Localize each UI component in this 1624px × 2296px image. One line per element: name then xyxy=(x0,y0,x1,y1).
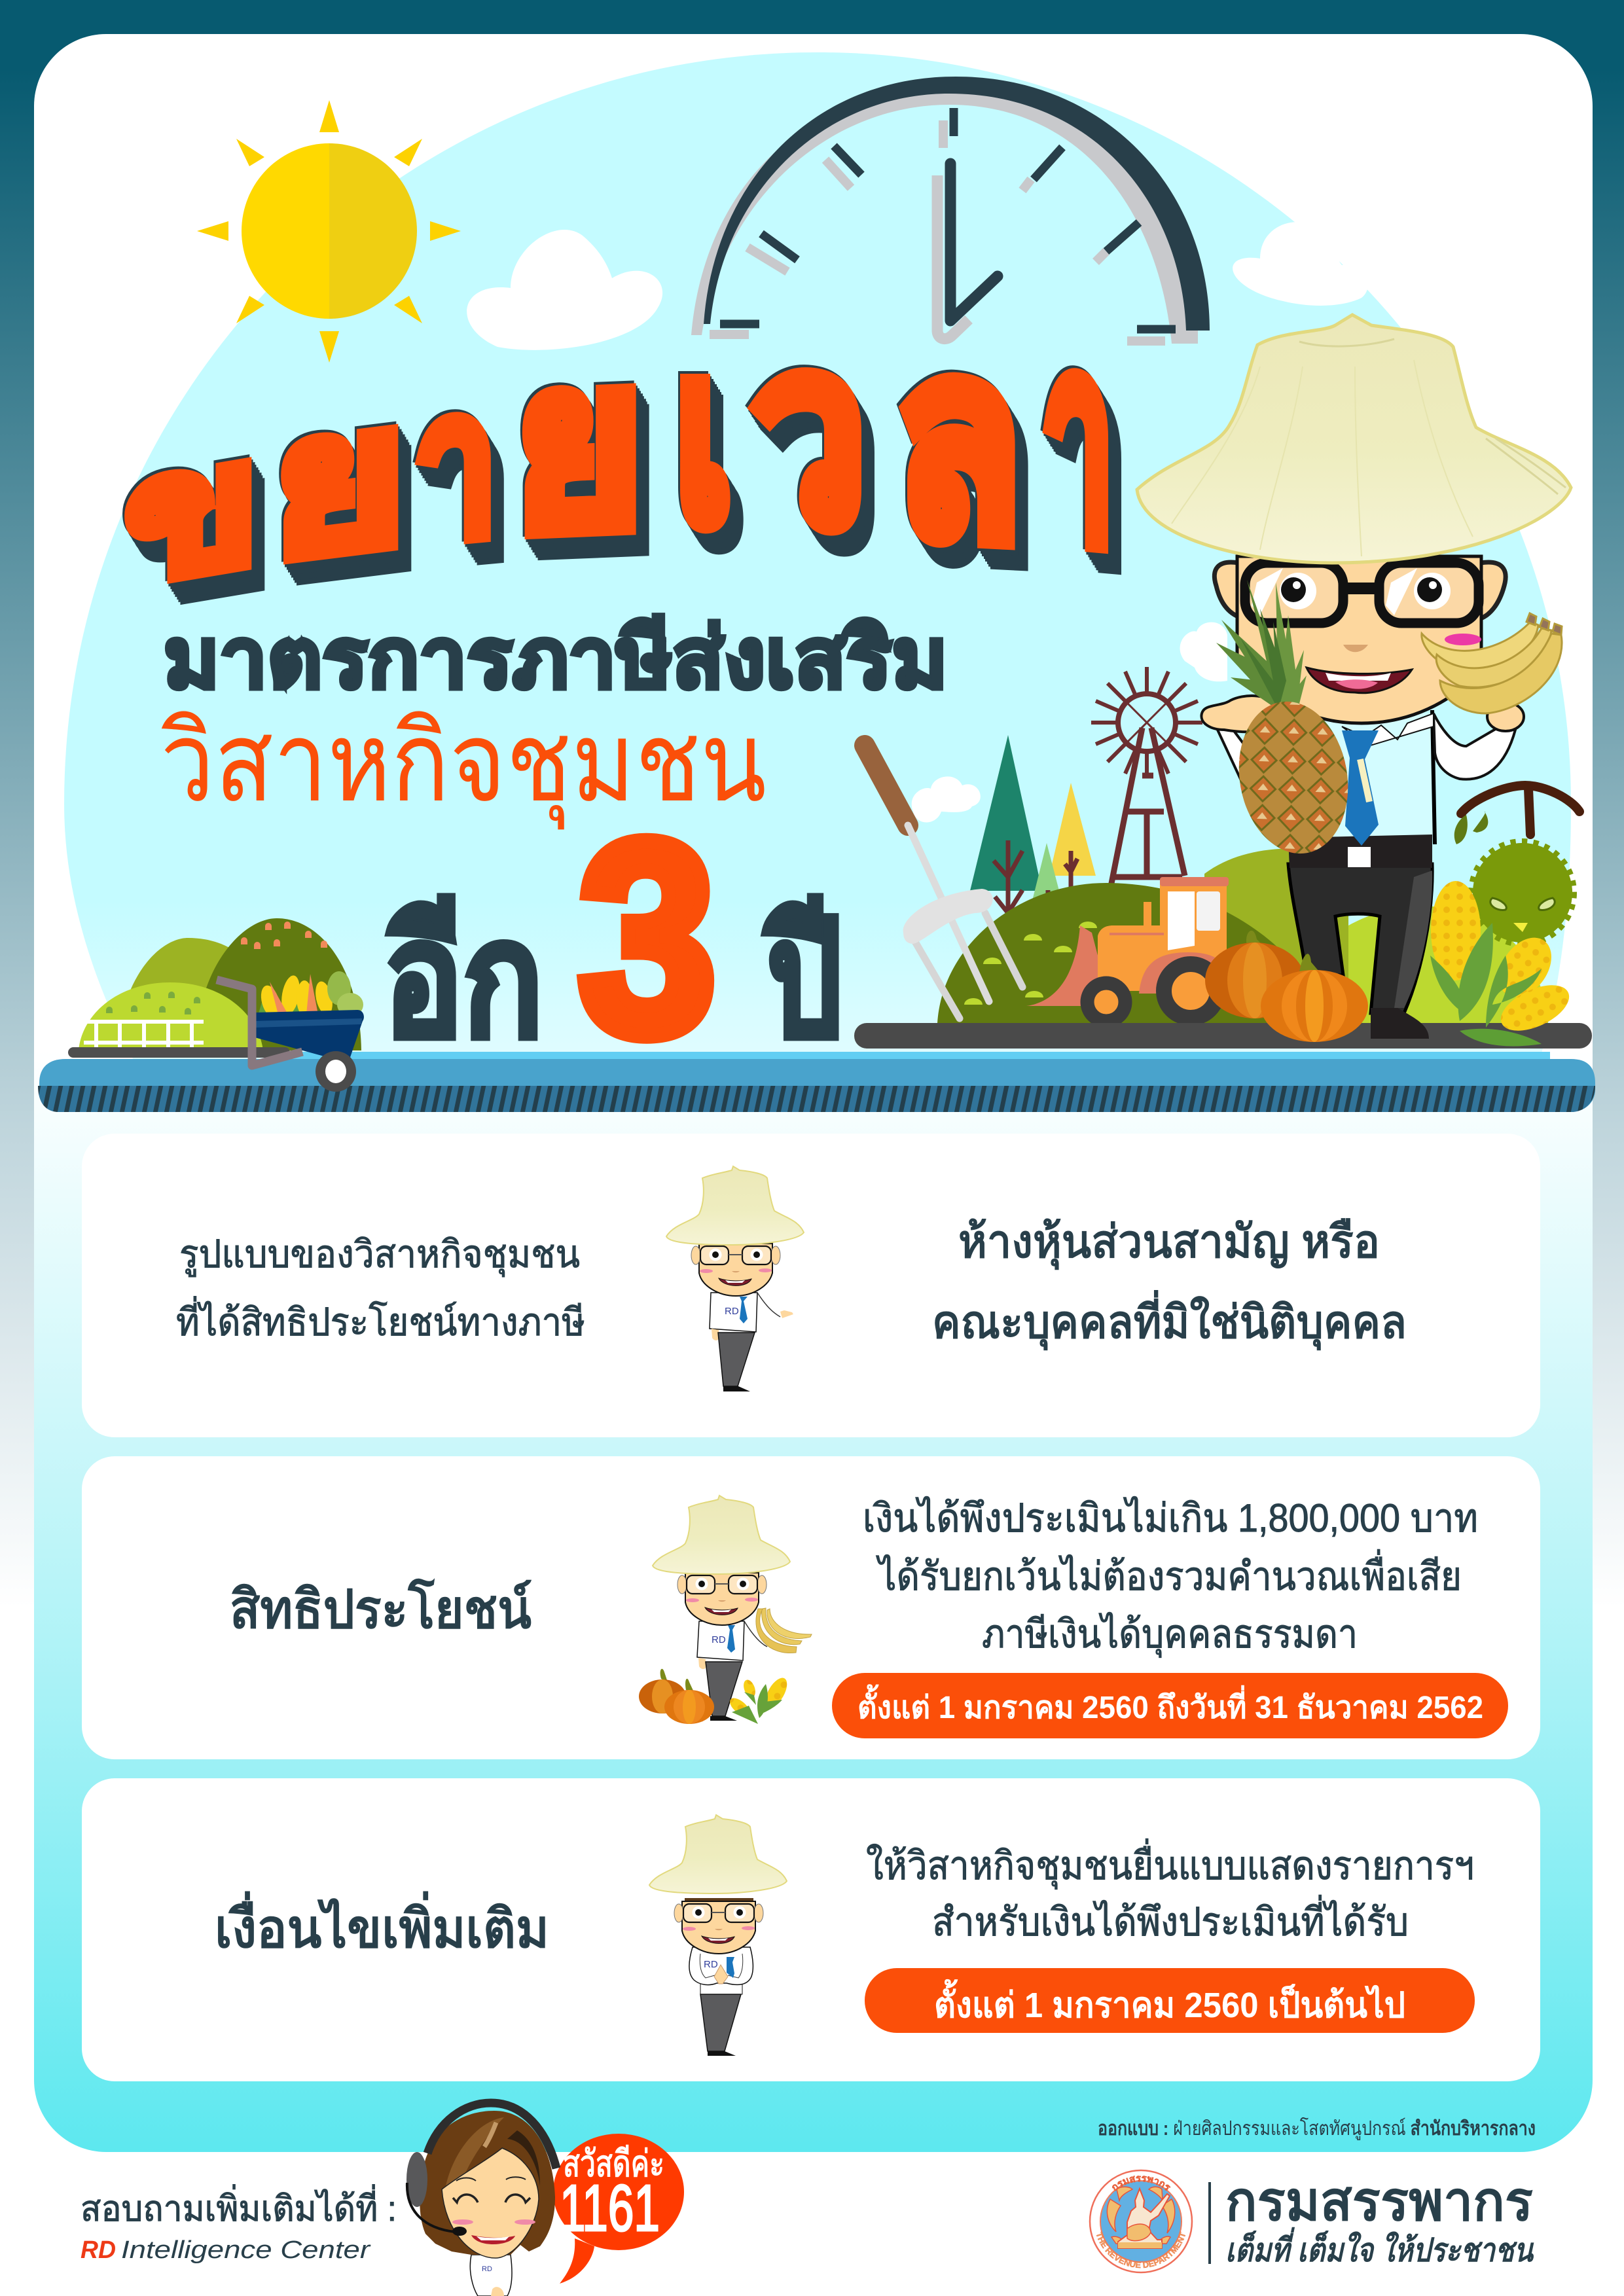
hotline number: 1161 xyxy=(560,2172,660,2245)
title: extended period: ย xyxy=(515,315,643,576)
illustration: left hills xyxy=(79,918,361,1050)
icon: cloud near pineapple xyxy=(1180,622,1227,681)
clock hand xyxy=(950,164,998,321)
illustration: lime hill xyxy=(1342,906,1548,1023)
hat xyxy=(1137,315,1571,563)
character: mascot with produce: RD xyxy=(712,1634,726,1645)
sky dome xyxy=(64,52,1571,1086)
character: call centre agent xyxy=(406,2103,556,2296)
word: years: ปี xyxy=(763,889,842,1070)
panel: benefits: ได้รับยกเว้นไม่ต้องรวมคำนวณเพื่อเสีย xyxy=(876,1549,1462,1598)
pumpkins xyxy=(660,1669,668,1682)
seal lettering: กรมสรรพากร xyxy=(1112,2176,1171,2191)
title: extended period xyxy=(126,286,1113,619)
left hand xyxy=(1201,696,1280,732)
speech bubble xyxy=(553,2134,684,2284)
label: eligible enterprise form: รูปแบบของวิสาหกิจชุมชน xyxy=(179,1233,580,1278)
brows and eyes xyxy=(456,2177,526,2181)
road xyxy=(854,1023,1592,1049)
legs xyxy=(1288,864,1432,1013)
date pill: ตั้งแต่ 1 มกราคม 2560 ถึงวันที่ 31 ธันวาคม 2562 xyxy=(857,1684,1483,1725)
character: mascot presenting xyxy=(666,1166,804,1391)
label: extra conditions: เงื่อนไขเพิ่มเติม xyxy=(215,1891,549,1959)
mouth xyxy=(471,2235,515,2244)
seal ornaments xyxy=(1107,2187,1175,2244)
subtitle: community enterprise: วิสาหกิจชุมชน xyxy=(160,700,767,830)
head xyxy=(1237,556,1481,723)
panel: business type: ที่ได้สิทธิประโยชน์ทางภาษี xyxy=(176,1296,585,1344)
icon: durian xyxy=(1473,843,1572,942)
illustration: windmill xyxy=(1091,667,1202,903)
left road xyxy=(68,1047,290,1058)
credit line: ออกแบบ : ฝ่ายศิลปกรรมและโสตทัศนูปกรณ์ สำนักบริหารกลาง xyxy=(1098,2117,1536,2140)
clock ticks shadow xyxy=(710,120,1165,341)
character: call centre agent: RD xyxy=(482,2265,492,2273)
illustration: olive hill xyxy=(1204,848,1348,1023)
logo: revenue department seal: THE REVENUE DEPARTMENT xyxy=(1096,2232,1185,2269)
corn xyxy=(761,1674,791,1711)
character: mascot with produce xyxy=(639,1496,812,1724)
icon: garden fork xyxy=(865,745,1022,1018)
clock rim shadow xyxy=(691,88,1198,344)
logo divider xyxy=(1208,2182,1211,2264)
number: 3: 3 xyxy=(579,785,716,1092)
clock hand shadow xyxy=(937,175,969,339)
illustration: tree trunks xyxy=(994,840,1077,920)
date pill xyxy=(865,1968,1475,2033)
face xyxy=(442,2148,539,2258)
date pill xyxy=(832,1673,1508,1738)
department name: กรมสรรพากร xyxy=(1225,2170,1533,2232)
cheek xyxy=(1445,634,1481,645)
icon: pumpkin back xyxy=(1205,931,1305,1018)
tie xyxy=(1342,730,1379,846)
title: extended period: า xyxy=(415,350,497,581)
character: mascot wai: RD xyxy=(704,1959,718,1970)
water strip xyxy=(290,1052,1550,1060)
right arm xyxy=(1434,713,1515,780)
department slogan: เต็มที่ เต็มใจ ให้ประชาชน xyxy=(1225,2227,1534,2269)
belt xyxy=(1288,834,1432,868)
character: mascot presenting: RD xyxy=(725,1306,739,1317)
illustration: tractor xyxy=(1026,877,1229,1021)
icon: corn xyxy=(1430,881,1576,1046)
subtitle: tax measure: มาตรการภาษีส่งเสริม xyxy=(164,612,948,706)
collar xyxy=(1342,713,1434,746)
microphone xyxy=(407,2183,455,2232)
icon: cloud right xyxy=(1233,222,1368,306)
right hand xyxy=(1487,702,1524,731)
title: extended period: า xyxy=(1043,286,1113,598)
icon: durian leaves xyxy=(1454,812,1488,844)
contact heading: สอบถามเพิ่มเติมได้ที่ : xyxy=(81,2184,397,2229)
pineapple crown xyxy=(1216,580,1307,710)
answer: partnership: ห้างหุ้นส่วนสามัญ หรือ xyxy=(958,1216,1380,1270)
illustration: dark hill xyxy=(937,883,1309,1023)
title: extended period: ว xyxy=(753,294,866,575)
left arm xyxy=(1218,726,1260,779)
panel: extra conditions xyxy=(82,1778,1540,2081)
icon: durian branch xyxy=(1461,785,1579,834)
pupils xyxy=(1281,577,1306,602)
pineapple body xyxy=(1227,693,1360,862)
shirt xyxy=(1291,713,1434,839)
word: another: อีก xyxy=(384,889,543,1070)
cheeks xyxy=(452,2219,473,2225)
glasses xyxy=(1245,563,1343,623)
bananas xyxy=(1422,613,1562,713)
label: benefits: สิทธิประโยชน์ xyxy=(230,1579,532,1640)
seal deity xyxy=(1118,2189,1170,2248)
greeting: สวัสดีค่ะ xyxy=(563,2143,664,2184)
illustration: small tree xyxy=(1032,843,1062,903)
contact service name: RD xyxy=(81,2236,116,2264)
title: extended period: ข xyxy=(126,406,259,619)
icon: small cloud xyxy=(912,776,981,822)
date pill: ตั้งแต่ 1 มกราคม 2560 เป็นต้นไป xyxy=(934,1979,1405,2025)
body xyxy=(470,2255,512,2296)
icon: pumpkin front xyxy=(1261,954,1368,1042)
nose xyxy=(1343,645,1368,652)
panel: benefits xyxy=(82,1456,1540,1759)
illustration: green tree xyxy=(970,735,1042,891)
mouth xyxy=(1307,668,1412,693)
hill dots xyxy=(964,922,1097,1005)
headband xyxy=(427,2103,556,2168)
blue ground band xyxy=(38,1059,1595,1112)
icon: cloud left xyxy=(467,230,662,350)
bananas xyxy=(756,1608,812,1653)
buckle xyxy=(1348,847,1371,867)
hair xyxy=(420,2111,555,2255)
panel: extra conditions: สำหรับเงินได้พึงประเมินที่ได้รับ xyxy=(932,1895,1409,1944)
clock ticks xyxy=(720,108,1176,329)
title: extended period: เ xyxy=(676,305,731,571)
panel: business type xyxy=(82,1134,1540,1437)
shoe xyxy=(1371,1008,1429,1039)
icon: wheelbarrow with vegetables xyxy=(217,971,364,1092)
panel: benefits: ภาษีเงินได้บุคคลธรรมดา xyxy=(982,1611,1358,1658)
ears xyxy=(1214,562,1244,619)
icon: sun xyxy=(197,100,461,363)
contact service name: Intelligence Center xyxy=(121,2236,371,2264)
conditions text: ให้วิสาหกิจชุมชนยื่นแบบแสดงรายการฯ xyxy=(866,1839,1474,1890)
title: extended period: ล xyxy=(896,293,1021,592)
title: extended period: ย xyxy=(274,367,405,597)
clock xyxy=(691,77,1210,344)
ear cup xyxy=(406,2152,427,2207)
logo: revenue department seal xyxy=(1089,2169,1193,2274)
illustration: yellow tree xyxy=(1049,783,1096,876)
character: mascot wai xyxy=(649,1815,787,2056)
benefit text: เงินได้พึงประเมินไม่เกิน 1,800,000 บาท xyxy=(863,1496,1478,1540)
character: farmer mascot xyxy=(1137,315,1571,1039)
panel: business type: คณะบุคคลที่มิใช่นิติบุคคล xyxy=(932,1291,1407,1350)
clock rim xyxy=(704,77,1210,331)
